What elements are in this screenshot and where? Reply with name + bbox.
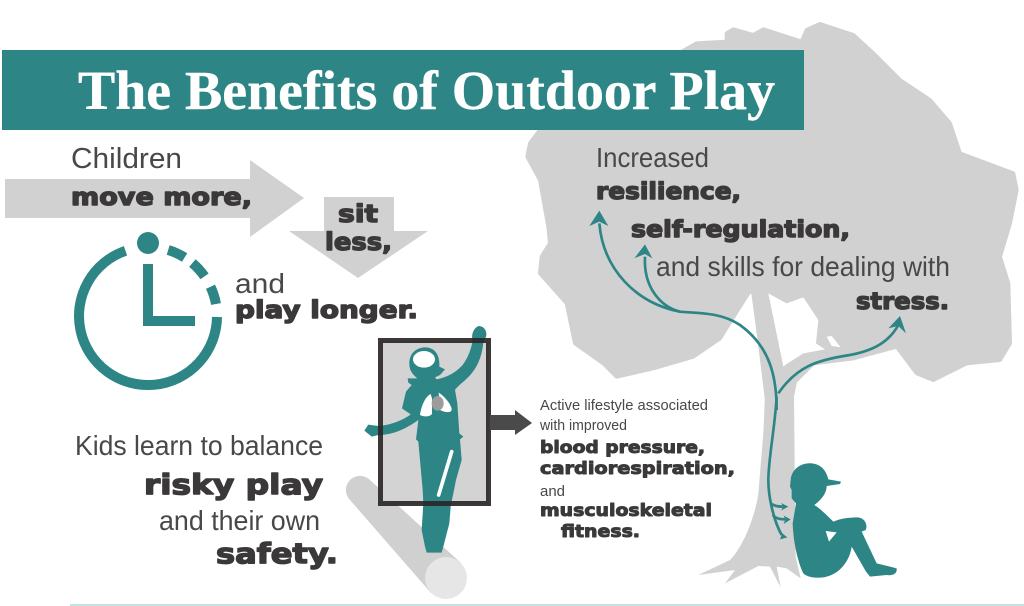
text: sit less: less,	[325, 228, 392, 256]
balance log	[346, 476, 467, 599]
text: children move more	[71, 143, 252, 211]
child balancing with highlighted box	[364, 326, 488, 553]
text: active lifestyle: musculoskeletal	[540, 501, 712, 521]
text: resilience benefits: stress.	[856, 289, 949, 315]
text: resilience benefits: Increased	[596, 142, 709, 173]
child silhouette	[364, 326, 486, 553]
tree trunk and roots	[698, 395, 801, 587]
title banner	[2, 50, 804, 130]
tree illustration	[527, 24, 1017, 587]
text: and play longer: and	[235, 268, 285, 299]
box background	[380, 340, 488, 504]
box frame	[380, 340, 488, 504]
text: risky play and safety: Kids learn to balance	[75, 430, 323, 461]
text: and play longer	[235, 268, 418, 324]
text: sit less: sit	[338, 200, 378, 228]
text: resilience benefits: self-regulation,	[631, 217, 850, 243]
tree canopy	[527, 24, 1017, 403]
bottom rule	[70, 604, 1024, 606]
icon: clock	[79, 232, 217, 385]
text: resilience benefits	[596, 142, 950, 315]
text: active lifestyle: with improved	[539, 417, 627, 434]
text: children move more: Children	[71, 143, 182, 175]
text: active lifestyle: blood pressure,	[540, 438, 705, 458]
text: risky play and safety	[75, 430, 338, 570]
right arrow	[5, 160, 304, 237]
text: risky play and safety: risky play	[144, 468, 323, 501]
text: active lifestyle: cardiorespiration,	[540, 459, 735, 479]
arrow to resilience and self-regulation	[589, 211, 906, 410]
text: active lifestyle: fitness.	[561, 522, 640, 542]
text: children move more: move more,	[71, 183, 252, 211]
text: risky play and safety: and their own	[159, 505, 320, 536]
arrow to health text	[490, 410, 532, 435]
arrows to child	[768, 397, 791, 539]
growth arrows on tree	[589, 211, 906, 539]
text: resilience benefits: resilience,	[596, 179, 741, 205]
text: sit less	[325, 200, 392, 256]
text: resilience benefits: and skills for dealing with	[656, 251, 950, 282]
text: active lifestyle: and	[540, 483, 565, 500]
seated child silhouette	[790, 463, 897, 578]
down arrow	[289, 197, 428, 278]
text: active lifestyle	[539, 397, 735, 542]
title banner: The Benefits of Outdoor Play	[78, 60, 775, 121]
text: active lifestyle: Active lifestyle associated	[540, 397, 708, 414]
text: risky play and safety: safety.	[216, 537, 338, 570]
text: and play longer: play longer.	[235, 296, 418, 324]
